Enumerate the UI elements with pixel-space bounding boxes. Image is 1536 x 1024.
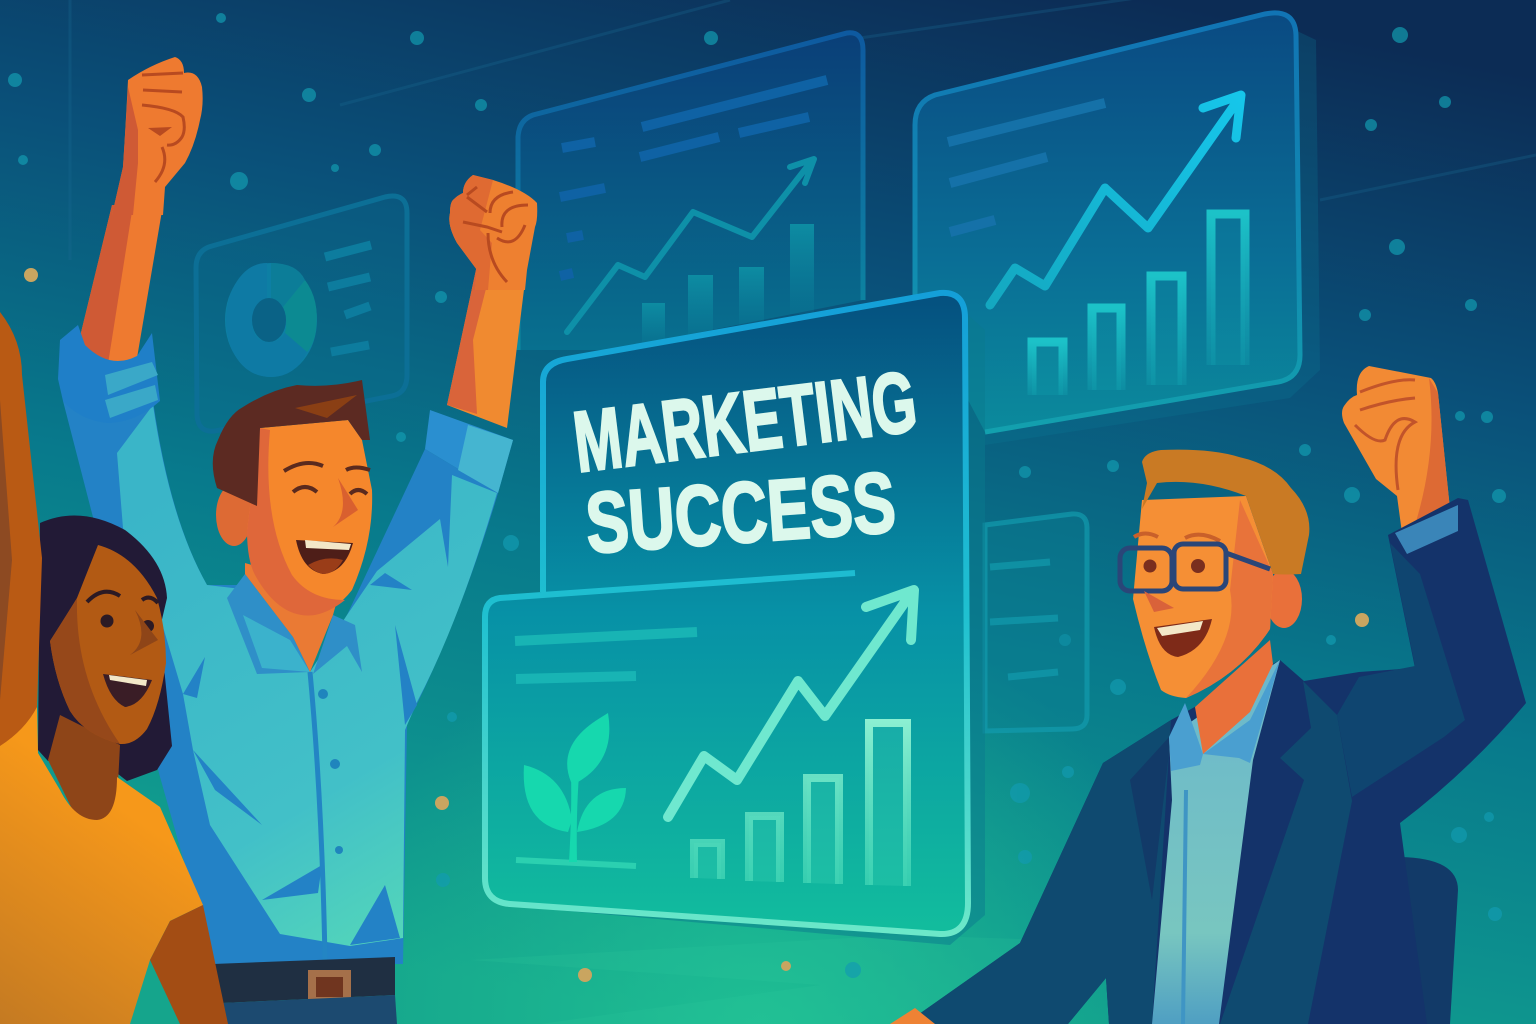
bar chart bbox=[694, 723, 907, 886]
brows bbox=[1134, 534, 1220, 541]
donut chart bbox=[225, 263, 317, 377]
hair bbox=[38, 515, 172, 781]
shirt bbox=[1152, 660, 1280, 1024]
figure: man in blue shirt bbox=[58, 57, 537, 1024]
eyes bbox=[87, 592, 158, 603]
right cuff bbox=[425, 410, 513, 493]
nose bbox=[130, 610, 158, 655]
raised left arm and fist bbox=[78, 57, 203, 366]
heading: marketing: MARKETING bbox=[569, 354, 922, 491]
figure: man in navy blazer bbox=[890, 366, 1526, 1024]
collar bbox=[1169, 660, 1280, 771]
mouth bbox=[1154, 619, 1212, 657]
right arm bbox=[150, 905, 228, 1024]
hand bbox=[890, 1008, 935, 1024]
chair bbox=[1380, 857, 1458, 1024]
trend arrow bbox=[990, 95, 1241, 305]
face bbox=[1133, 496, 1273, 698]
left cuff bbox=[58, 325, 160, 423]
text lines bbox=[515, 632, 697, 679]
belt bbox=[213, 957, 395, 1004]
panel: left donut dashboard bbox=[196, 196, 407, 431]
blazer bbox=[905, 498, 1526, 1024]
hair bbox=[213, 380, 370, 506]
shirt bbox=[63, 401, 498, 964]
cuff bbox=[1395, 505, 1458, 554]
mouth bbox=[296, 540, 353, 574]
panel: top middle dashboard bbox=[518, 33, 863, 350]
panel: main marketing success board bbox=[485, 293, 985, 945]
figure: woman in yellow shirt bbox=[0, 312, 228, 1024]
right forearm and fist bbox=[447, 175, 537, 428]
icon: plant bbox=[516, 713, 636, 866]
heading: success: SUCCESS bbox=[583, 455, 899, 572]
panel: top right dashboard bbox=[915, 13, 1320, 445]
nose bbox=[333, 478, 358, 527]
face bbox=[50, 545, 166, 744]
glasses bbox=[1120, 544, 1270, 591]
raised fist bbox=[1342, 366, 1450, 533]
trend arrow bbox=[567, 159, 814, 332]
face bbox=[247, 420, 372, 612]
neck bbox=[1195, 640, 1273, 754]
panel: right small dashboard bbox=[985, 514, 1087, 731]
mouth bbox=[103, 674, 152, 707]
eyes bbox=[1144, 559, 1205, 573]
neck bbox=[48, 715, 120, 823]
collar bbox=[227, 574, 362, 674]
nose bbox=[1144, 591, 1174, 612]
yellow shirt bbox=[0, 707, 203, 1024]
trend arrow bbox=[668, 590, 914, 817]
raised arm bbox=[0, 312, 42, 746]
ear bbox=[216, 484, 252, 546]
bars bbox=[642, 224, 814, 343]
ear bbox=[1266, 570, 1302, 628]
hair bbox=[1142, 450, 1309, 574]
bars bbox=[1032, 214, 1245, 395]
trousers bbox=[222, 995, 397, 1024]
neck bbox=[245, 563, 340, 672]
eyes and brows bbox=[284, 463, 370, 494]
